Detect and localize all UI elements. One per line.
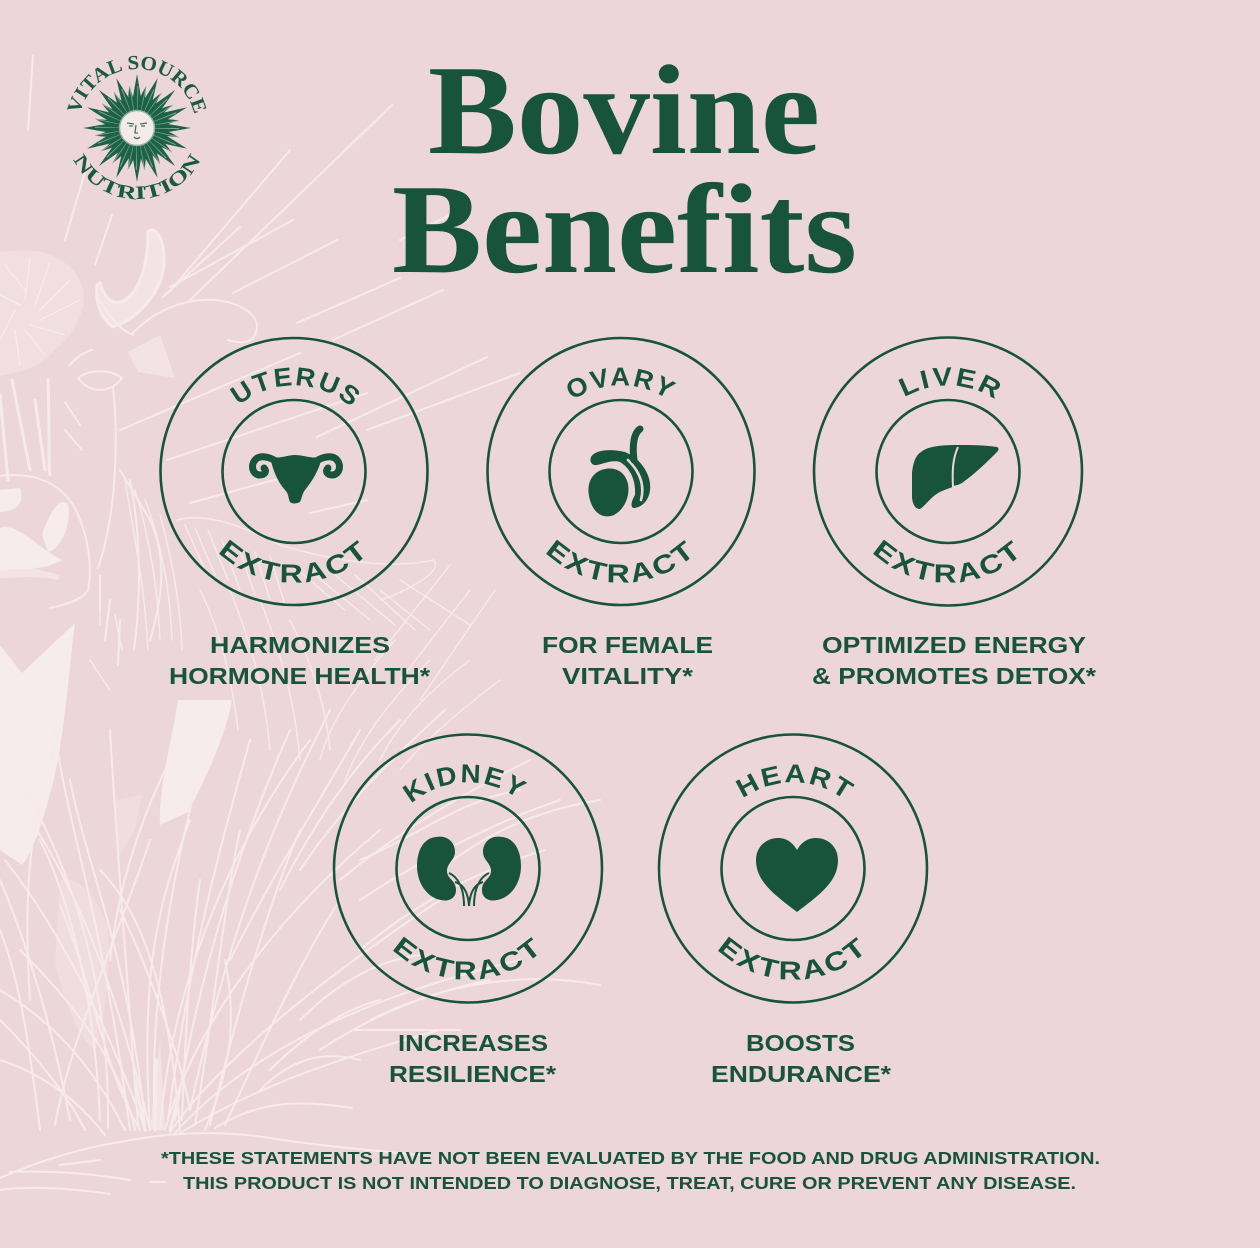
- badge: uterus extract: EXTRACT: [219, 540, 363, 583]
- label: uterus benefit: HORMONE HEALTH*: [169, 663, 430, 689]
- badge: liver extract: EXTRACT: [873, 540, 1017, 583]
- badge: heart extract: [658, 733, 928, 1004]
- label: ovary benefit: [542, 632, 713, 689]
- ground mound: [0, 1133, 420, 1194]
- cow face lines: [0, 350, 161, 665]
- logo text: [67, 56, 206, 200]
- icon: liver: [912, 445, 998, 509]
- label: liver benefit: & PROMOTES DETOX*: [812, 663, 1096, 689]
- grass leaf patches: [55, 795, 165, 1130]
- footnote disclaimer: THIS PRODUCT IS NOT INTENDED TO DIAGNOSE, TREAT, CURE OR PREVENT ANY DISEASE.: [183, 1173, 1076, 1193]
- logo: Vital Source Nutrition: [67, 56, 206, 200]
- label: ovary benefit: FOR FEMALE: [542, 632, 713, 658]
- label: liver benefit: [812, 632, 1096, 689]
- badge: liver extract: [812, 336, 1084, 607]
- cow nostril patches: [0, 488, 69, 580]
- cow head hair: [0, 250, 84, 376]
- grass strands: [0, 710, 600, 1135]
- title: Benefits: [392, 158, 857, 300]
- title: [392, 39, 857, 300]
- badge: heart extract: HEART: [736, 764, 855, 798]
- label: kidney benefit: RESILIENCE*: [389, 1061, 556, 1087]
- logo sun face: [120, 110, 154, 146]
- badge: kidney extract: EXTRACT: [393, 936, 537, 980]
- footnote disclaimer: [161, 1148, 1100, 1193]
- label: kidney benefit: [389, 1030, 556, 1087]
- badge: ovary extract: [486, 336, 756, 606]
- logo text: VITAL SOURCE: [67, 56, 206, 114]
- label: kidney benefit: INCREASES: [398, 1030, 548, 1056]
- cow ear: [100, 300, 257, 378]
- footnote disclaimer: *THESE STATEMENTS HAVE NOT BEEN EVALUATED BY THE FOOD AND DRUG ADMINISTRATION.: [161, 1148, 1100, 1168]
- label: liver benefit: OPTIMIZED ENERGY: [822, 632, 1086, 658]
- label: heart benefit: BOOSTS: [746, 1030, 855, 1056]
- label: heart benefit: ENDURANCE*: [711, 1061, 891, 1087]
- badge: uterus extract: UTERUS: [230, 367, 359, 404]
- logo sun rays: [83, 74, 191, 182]
- badge: liver extract: LIVER: [898, 367, 1000, 399]
- cow chest second patch: [160, 700, 232, 825]
- icon: ovary: [588, 429, 650, 516]
- sun rays: [28, 55, 520, 513]
- cow back hatching: [90, 480, 500, 780]
- icon: heart: [756, 838, 838, 912]
- badge: ovary extract: OVARY: [567, 368, 676, 397]
- label: heart benefit: [711, 1030, 891, 1087]
- icon: uterus: [253, 455, 339, 504]
- illustration: cow and grass background: [0, 55, 600, 1194]
- badge: kidney extract: KIDNEY: [402, 764, 528, 802]
- label: uterus benefit: [169, 632, 430, 689]
- badge: ovary extract: EXTRACT: [546, 540, 690, 583]
- logo text: NUTRITION: [73, 153, 200, 200]
- cow horn: [97, 230, 164, 327]
- badge: heart extract: EXTRACT: [718, 936, 862, 980]
- label: uterus benefit: HARMONIZES: [210, 632, 390, 658]
- icon: kidneys: [417, 837, 521, 906]
- title: Bovine: [428, 39, 820, 181]
- badge: kidney extract: [332, 733, 604, 1004]
- label: ovary benefit: VITALITY*: [562, 663, 693, 689]
- badge: uterus extract: [159, 336, 429, 606]
- cow chest white patch: [0, 623, 75, 865]
